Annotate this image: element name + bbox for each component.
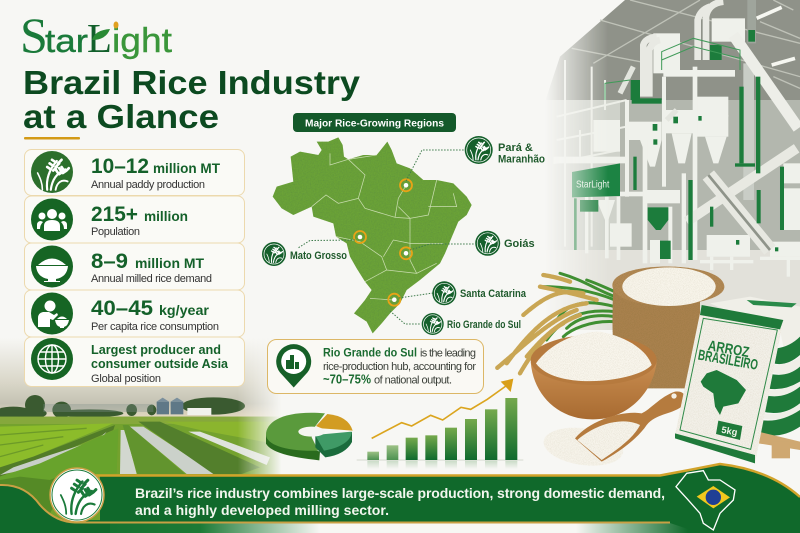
map markers bbox=[354, 179, 412, 306]
region label: Pará & Maranhão: Pará & bbox=[498, 142, 533, 154]
card: per capita consumption: 40–45 bbox=[91, 297, 153, 320]
icon: banner rice emblem bbox=[50, 468, 104, 522]
rice bag: Arroz Brasileiro: 5kg bbox=[721, 425, 739, 437]
callout: Rio Grande do Sul hub: ~70–75% bbox=[323, 372, 371, 386]
card: paddy production: million MT bbox=[153, 161, 221, 176]
logo: StarLight: ight bbox=[112, 22, 173, 60]
card: paddy production: 10–12 bbox=[91, 155, 149, 178]
region label: Mato Grosso: Mato Grosso bbox=[290, 250, 347, 262]
card: milled rice demand: million MT bbox=[135, 256, 205, 271]
region label: Mato Grosso bbox=[262, 242, 347, 266]
region label: Rio Grande do Sul: Rio Grande do Sul bbox=[447, 319, 521, 331]
icon: location pin bbox=[276, 344, 311, 388]
title underline bbox=[24, 137, 80, 140]
logo: StarLight: tar bbox=[45, 23, 88, 59]
rice bag: Arroz Brasileiro: ARROZ bbox=[707, 338, 750, 361]
pallet bbox=[758, 432, 800, 458]
spilled rice bbox=[541, 423, 625, 470]
callout: Rio Grande do Sul hub: of national output. bbox=[374, 374, 452, 386]
card: milled rice demand: 8–9 bbox=[91, 250, 128, 273]
banner: summary strip bbox=[0, 464, 800, 533]
card: paddy production: Annual paddy production bbox=[91, 179, 205, 191]
callout: Rio Grande do Sul hub: is the leading bbox=[420, 348, 476, 360]
card: population bbox=[24, 196, 244, 243]
region label: Rio Grande do Sul bbox=[422, 313, 521, 335]
banner: summary strip: and a highly developed milling sector. bbox=[135, 502, 389, 518]
title: at a Glance bbox=[23, 98, 219, 135]
chart: bar trend bbox=[357, 379, 523, 469]
stacked rice bags bbox=[710, 297, 800, 436]
rice bag: Arroz Brasileiro bbox=[675, 305, 783, 463]
map: Brazil bbox=[273, 137, 472, 333]
photo: rice products bbox=[497, 266, 800, 470]
burlap sack bbox=[612, 266, 724, 388]
silos and shed bbox=[157, 398, 211, 415]
card: population: million bbox=[144, 209, 188, 224]
callout: Rio Grande do Sul hub: Rio Grande do Sul bbox=[323, 348, 417, 360]
logo: StarLight bbox=[20, 7, 173, 63]
region label: Santa Catarina: Santa Catarina bbox=[460, 288, 527, 300]
arrow: growth trend bbox=[372, 379, 513, 438]
callout: Rio Grande do Sul hub: rice-production hub, accounting for bbox=[323, 361, 476, 373]
card: global position: consumer outside Asia bbox=[91, 357, 229, 371]
callout: Rio Grande do Sul hub bbox=[268, 340, 484, 394]
region label: Pará & Maranhão: Maranhão bbox=[498, 154, 545, 166]
mill towers bbox=[553, 18, 800, 277]
rice bag: Arroz Brasileiro: BRASILEIRO bbox=[697, 348, 759, 374]
photo: rice mill factory bbox=[543, 0, 800, 330]
panel: key statistics bbox=[24, 150, 244, 386]
card: population: Population bbox=[91, 226, 140, 238]
wooden bowl with rice bbox=[531, 332, 657, 419]
title: Brazil Rice Industry bbox=[23, 64, 361, 101]
card: global position: Largest producer and bbox=[91, 343, 221, 357]
logo: StarLight: L bbox=[87, 15, 112, 61]
photo: rice mill factory: StarLight bbox=[576, 179, 609, 190]
card: global position: Global position bbox=[91, 373, 161, 385]
region label: Pará & Maranhão bbox=[465, 136, 545, 166]
chart: 3D pie bbox=[266, 413, 353, 460]
green accents bbox=[574, 30, 784, 260]
card: milled rice demand bbox=[24, 243, 244, 290]
region label: Goiás bbox=[475, 231, 535, 256]
logo: StarLight: S bbox=[20, 7, 48, 63]
card: per capita consumption: kg/year bbox=[159, 303, 210, 318]
card: paddy production bbox=[24, 150, 244, 196]
region label: Santa Catarina bbox=[432, 281, 527, 305]
heading: major rice-growing regions bbox=[293, 113, 456, 132]
card: population: 215+ bbox=[91, 203, 138, 226]
card: milled rice demand: Annual milled rice demand bbox=[91, 273, 212, 285]
card: global position bbox=[24, 337, 244, 386]
rice panicle bbox=[497, 273, 615, 373]
photo: rice fields bbox=[0, 346, 280, 520]
wooden scoop bbox=[575, 391, 685, 462]
icon: Brazil outline with flag bbox=[676, 471, 735, 530]
title bbox=[23, 64, 361, 135]
heading: major rice-growing regions: Major Rice-Growing Regions bbox=[305, 118, 444, 130]
card: per capita consumption bbox=[24, 290, 244, 337]
banner: summary strip: Brazil’s rice industry combines large-scale production, strong domestic demand, bbox=[135, 485, 665, 501]
card: per capita consumption: Per capita rice consumption bbox=[91, 321, 219, 333]
leader lines bbox=[298, 150, 475, 324]
region label: Goiás: Goiás bbox=[504, 238, 535, 250]
